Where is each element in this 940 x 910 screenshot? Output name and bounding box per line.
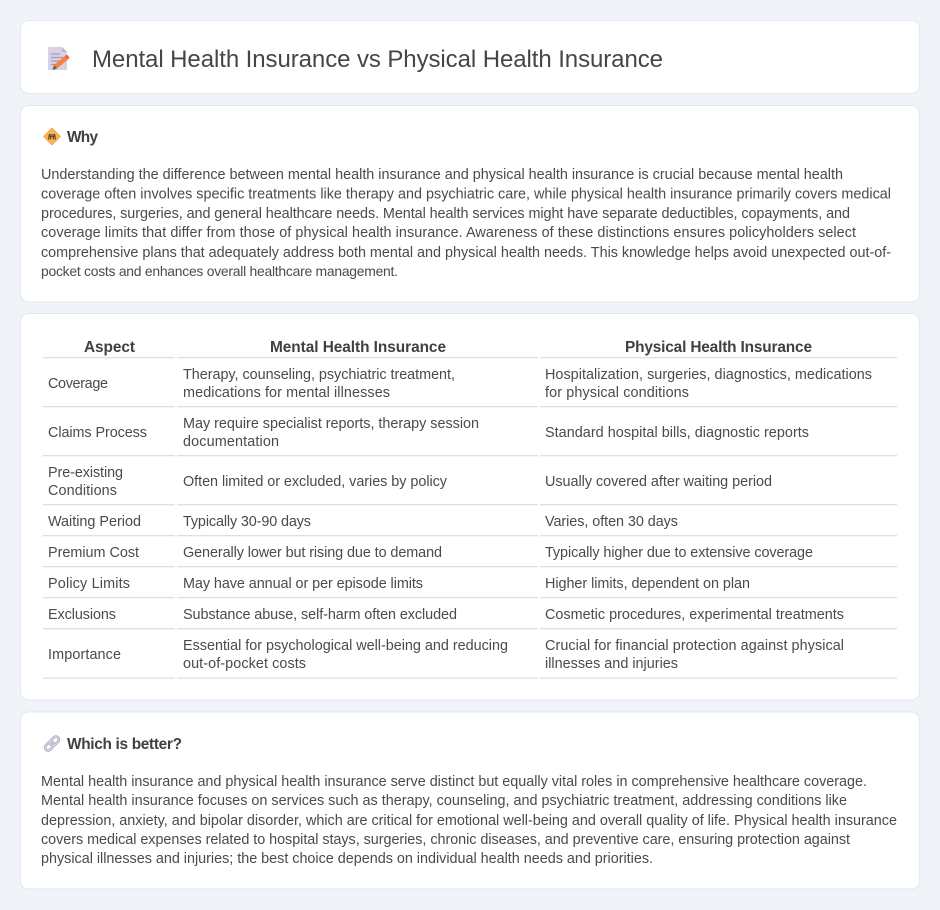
table row: premium cost: Premium Cost	[48, 545, 139, 561]
table row: pre-existing conditions: Often limited or excluded, varies by policy	[183, 474, 448, 490]
table row: policy limits: Policy Limits	[48, 576, 130, 592]
table row: pre-existing conditions	[43, 465, 897, 505]
icon: orange diamond sign	[44, 128, 60, 145]
table row: coverage: Hospitalization, surgeries, diagnostics, medications	[545, 367, 872, 383]
table row: waiting period	[43, 514, 897, 536]
title: Mental Health Insurance vs Physical Health Insurance	[92, 46, 663, 73]
table row: claims process	[43, 416, 897, 456]
table row: waiting period: Waiting Period	[48, 514, 141, 530]
table header row: Mental Health Insurance	[270, 339, 446, 356]
text block: why paragraph: pocket costs and enhances overall healthcare management.	[41, 263, 398, 279]
table header row	[43, 339, 897, 358]
panel: which is better	[20, 712, 920, 889]
text block: which is better paragraph	[41, 774, 897, 867]
table row: coverage: Therapy, counseling, psychiatric treatment,	[183, 367, 455, 383]
table row: claims process: May require specialist reports, therapy session	[183, 416, 479, 432]
icon: chain link	[44, 735, 60, 752]
table row: importance: illnesses and injuries	[545, 656, 678, 672]
text block: why paragraph: Understanding the difference between mental health insurance and physical health insurance is crucial because mental health	[41, 167, 843, 183]
table row: pre-existing conditions: Usually covered after waiting period	[545, 474, 772, 490]
table row: premium cost	[43, 545, 897, 567]
table row: pre-existing conditions: Conditions	[48, 483, 117, 499]
table row: pre-existing conditions: Pre-existing	[48, 465, 123, 481]
table row: policy limits	[43, 576, 897, 598]
text block: why paragraph: coverage limits that differ from those of physical health insurance. Awareness of these distinctions ensures policyholders select	[41, 225, 856, 241]
table row: claims process: documentation	[183, 434, 279, 450]
table row: coverage: Coverage	[48, 376, 108, 392]
table row: coverage: medications for mental illnesses	[183, 385, 390, 401]
text block: why paragraph	[41, 167, 891, 279]
table row: importance: Essential for psychological well-being and reducing	[183, 638, 508, 654]
table row: importance	[43, 638, 897, 679]
text block: why paragraph: coverage often involves specific treatments like therapy and psychiatric care, while physical health insurance primarily covers medical	[41, 186, 891, 202]
table row: waiting period: Typically 30-90 days	[183, 514, 311, 530]
heading: which is better: Which is better?	[67, 736, 182, 753]
icon: document with pencil	[48, 47, 70, 70]
table header row: Physical Health Insurance	[625, 339, 812, 356]
text block: which is better paragraph: physical illnesses and injuries; the best choice depends on individual health needs and priorities.	[41, 851, 653, 867]
text block: which is better paragraph: Mental health insurance and physical health insurance serve distinct but equally vital roles in comprehensive healthcare coverage.	[41, 774, 867, 790]
table row: exclusions: Substance abuse, self-harm often excluded	[183, 607, 457, 623]
heading: why: Why	[67, 129, 98, 146]
table row: premium cost: Generally lower but rising due to demand	[183, 545, 442, 561]
table row: policy limits: Higher limits, dependent on plan	[545, 576, 750, 592]
text block: which is better paragraph: covers medical expenses related to hospital stays, surgeries, chronic diseases, and preventive care, ensuring protection against	[41, 832, 850, 848]
table row: exclusions: Cosmetic procedures, experimental treatments	[545, 607, 844, 623]
table row: coverage: for physical conditions	[545, 385, 689, 401]
text block: why paragraph: procedures, surgeries, and general healthcare needs. Mental health services might have separate deductibles, copayments, and	[41, 206, 850, 222]
text block: which is better paragraph: depression, anxiety, and bipolar disorder, which are critical for emotional well-being and overall quality of life. Physical health insurance	[41, 813, 897, 829]
table row: importance: out-of-pocket costs	[183, 656, 306, 672]
table row: coverage	[43, 367, 897, 407]
table row: importance: Crucial for financial protection against physical	[545, 638, 844, 654]
table row: claims process: Standard hospital bills, diagnostic reports	[545, 425, 809, 441]
table row: waiting period: Varies, often 30 days	[545, 514, 678, 530]
panel: why	[20, 106, 920, 302]
table header row: Aspect	[84, 339, 135, 356]
table row: policy limits: May have annual or per episode limits	[183, 576, 423, 592]
panel: title header	[20, 20, 920, 94]
panel: comparison table	[20, 314, 920, 700]
table row: importance: Importance	[48, 647, 121, 663]
table row: premium cost: Typically higher due to extensive coverage	[545, 545, 813, 561]
text block: why paragraph: comprehensive plans that adequately address both mental and physical health needs. This knowledge helps avoid unexpected out-of-	[41, 245, 891, 261]
table row: exclusions: Exclusions	[48, 607, 116, 623]
text block: which is better paragraph: Mental health insurance focuses on services such as therapy, counseling, and psychiatric treatment, addressing conditions like	[41, 793, 847, 809]
table row: exclusions	[43, 607, 897, 629]
table row: claims process: Claims Process	[48, 425, 147, 441]
